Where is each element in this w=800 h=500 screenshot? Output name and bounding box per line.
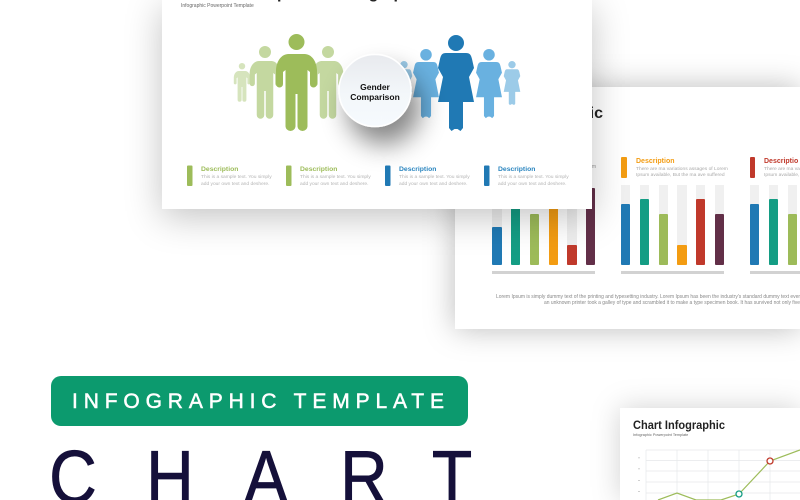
legend: red description [750, 157, 800, 178]
icon: green men group [234, 34, 343, 131]
description 3: Description [399, 166, 436, 173]
legend: orange description: Description [636, 158, 675, 165]
legend: orange description [621, 157, 728, 178]
center circle label: Comparison [350, 92, 400, 102]
description 4: add your own text and deshere. [498, 181, 567, 187]
panel: bar chart slide [455, 87, 800, 329]
panel: gender comparison slide [162, 0, 592, 209]
legend: orange description: Ipsum available, But the ma ave suffered [636, 172, 725, 178]
line chart [638, 450, 800, 500]
description 4: Description [498, 166, 535, 173]
bar chart: first group [492, 185, 595, 274]
description 4 [484, 166, 569, 187]
lorem ipsum paragraph [496, 294, 800, 306]
description 4: This is a sample text. You simply [498, 174, 569, 180]
legend: first chart description: assages of Lorem [556, 164, 596, 170]
description 2: This is a sample text. You simply [300, 174, 371, 180]
panel: line chart slide [620, 408, 800, 500]
badge: infographic template: INFOGRAPHIC TEMPLATE [72, 390, 444, 413]
description 1: Description [201, 166, 238, 173]
slide heading: Chart Infographic [470, 105, 603, 122]
description 1: add your own text and deshere. [201, 181, 270, 187]
description 1: This is a sample text. You simply [201, 174, 272, 180]
description 2: add your own text and deshere. [300, 181, 369, 187]
description 3 [385, 166, 470, 187]
bar chart: third group [750, 185, 800, 274]
lorem ipsum paragraph: Lorem Ipsum is simply dummy text of the printing and typesetting industry. Lorem Ipsum has been the industry's standard dummy text ever [496, 294, 800, 300]
legend: orange description: There are ma variations assages of Lorem [636, 166, 728, 172]
center circle label [339, 54, 411, 126]
center circle label: Gender [360, 82, 391, 92]
badge: infographic template [51, 376, 468, 426]
description 1 [187, 166, 272, 187]
icon: blue women group [396, 35, 520, 131]
legend: red description: Descriptio [764, 158, 798, 165]
bar chart: second group [621, 185, 724, 274]
description 3: This is a sample text. You simply [399, 174, 470, 180]
lorem ipsum paragraph: an unknown printer took a galley of type and scrambled it to make a type specimen book. It has survived not only five [544, 300, 800, 306]
line chart heading: Chart Infographic [633, 418, 725, 432]
description 2: Description [300, 166, 337, 173]
description 2 [286, 166, 371, 187]
description 3: add your own text and deshere. [399, 181, 468, 187]
line chart subtitle: Infographic Powerpoint Template [633, 433, 688, 437]
slide subtitle: Infographic Powerpoint Template [181, 3, 254, 9]
